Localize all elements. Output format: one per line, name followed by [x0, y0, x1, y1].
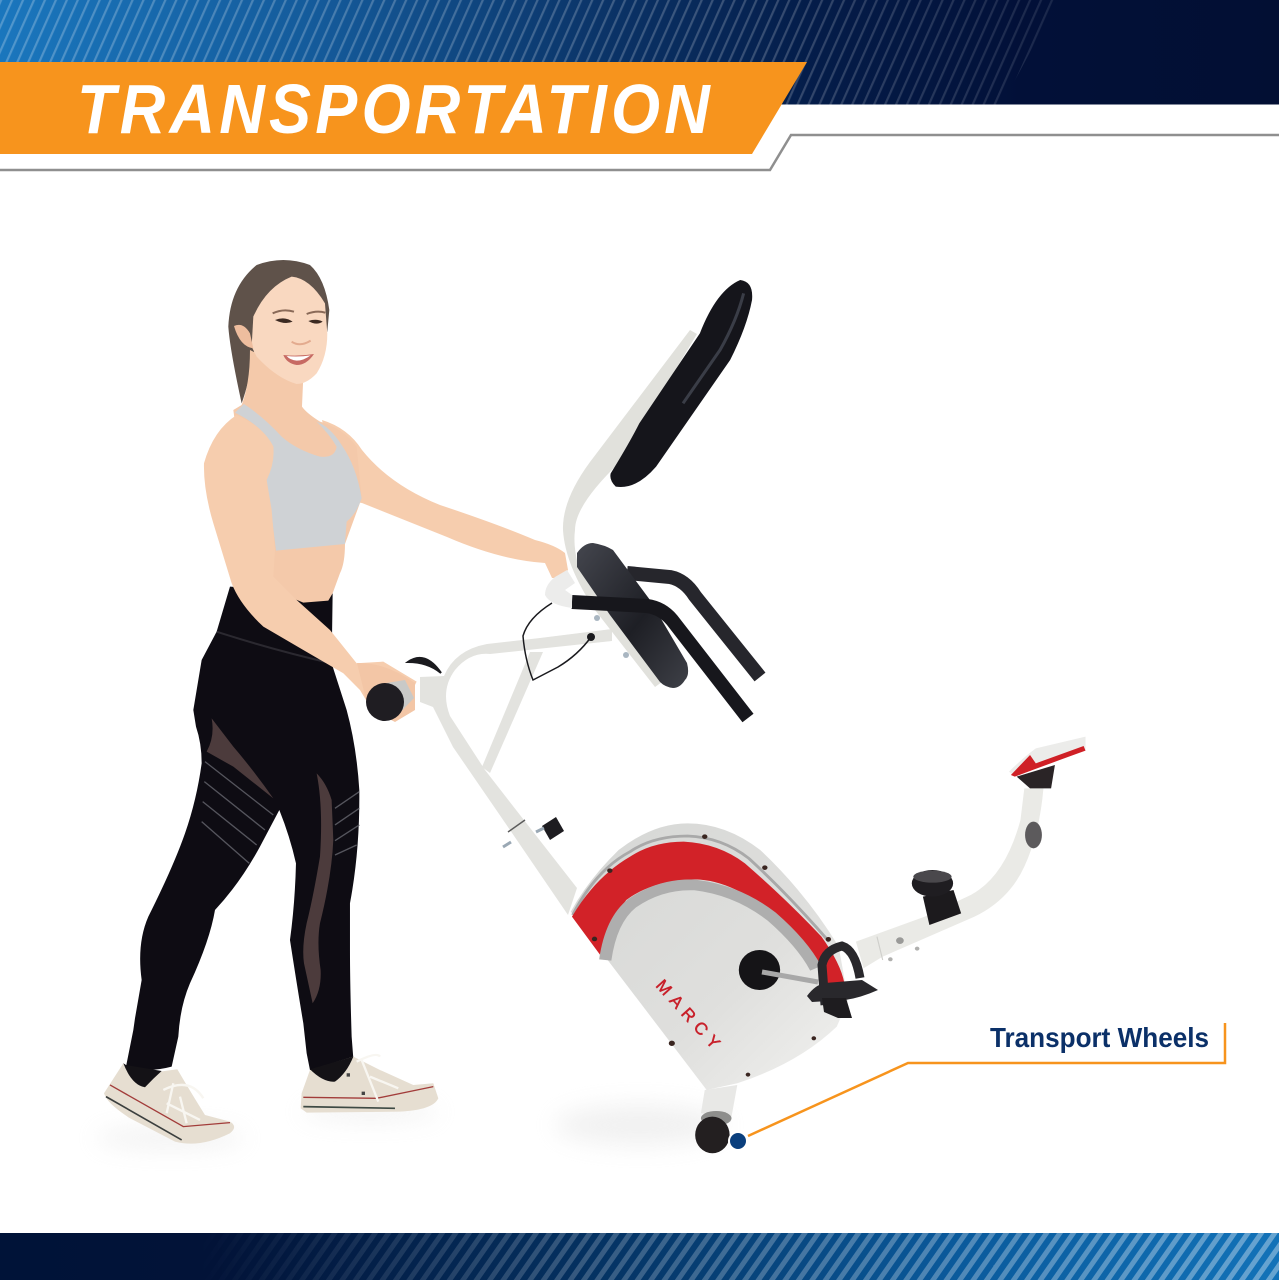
top banner band: [0, 0, 1279, 104]
frame collar: [508, 820, 525, 832]
backrest pad: [610, 280, 752, 487]
pulse cable: [523, 603, 591, 680]
grey trim: [573, 836, 829, 942]
seat adjust knob: [503, 817, 564, 847]
waistband seam: [217, 632, 332, 663]
seat bolts: [594, 615, 629, 658]
title: TRANSPORTATION: [77, 71, 712, 149]
flywheel housing and rear stem: [571, 737, 1086, 1153]
wheel bracket: [701, 1085, 737, 1117]
backrest post: [563, 330, 697, 687]
facial features: [273, 310, 325, 365]
seat pad: [577, 543, 688, 688]
leggings stitching: [202, 762, 359, 863]
pedal: [807, 946, 878, 1018]
face: [252, 277, 327, 384]
legs and leggings: [104, 587, 438, 1144]
crank hub: [739, 950, 780, 990]
right shoe: [301, 1055, 438, 1113]
handle elbow: [545, 570, 575, 608]
hair: [228, 260, 329, 403]
brand label: MARCY: [652, 976, 724, 1053]
tension knob: [912, 870, 961, 925]
console: [1009, 737, 1086, 788]
person: woman pushing the bike: [104, 260, 568, 1144]
front handle: [572, 602, 748, 718]
diagonal brace: [482, 652, 543, 773]
torso, near arm and head: [204, 260, 417, 707]
housing shell: [571, 823, 848, 1090]
main frame: [420, 629, 612, 915]
rear stem: [856, 788, 1043, 968]
stem grip: [1025, 822, 1042, 848]
crank arm: [762, 972, 818, 982]
callout: transport wheels: [729, 1022, 1225, 1150]
grip curve: [408, 658, 441, 673]
bottom banner band: [0, 1233, 1279, 1280]
grip and collar: [366, 680, 414, 721]
floor shadows: [95, 1104, 725, 1148]
title ribbon: [0, 62, 1279, 170]
left shoe: [104, 1063, 234, 1144]
caster wheel: [695, 1111, 732, 1153]
transport bike: [357, 280, 1086, 1153]
neck and torso: [233, 350, 362, 603]
red band: [572, 842, 844, 987]
inner trim: [605, 885, 816, 968]
callout leader line: [748, 1023, 1225, 1136]
mesh panels: [207, 718, 333, 1003]
near hand: [357, 663, 415, 722]
sports top: [235, 404, 362, 551]
near arm: [204, 415, 417, 707]
cable jack: [587, 633, 595, 641]
ear: [234, 325, 253, 348]
far arm: [322, 420, 568, 578]
callout dot: [729, 1132, 747, 1150]
rear handle tube: [627, 573, 760, 677]
callout label: Transport Wheels: [990, 1022, 1209, 1053]
stem sleeve and bolts: [877, 937, 919, 961]
housing bolts: [592, 834, 831, 1077]
